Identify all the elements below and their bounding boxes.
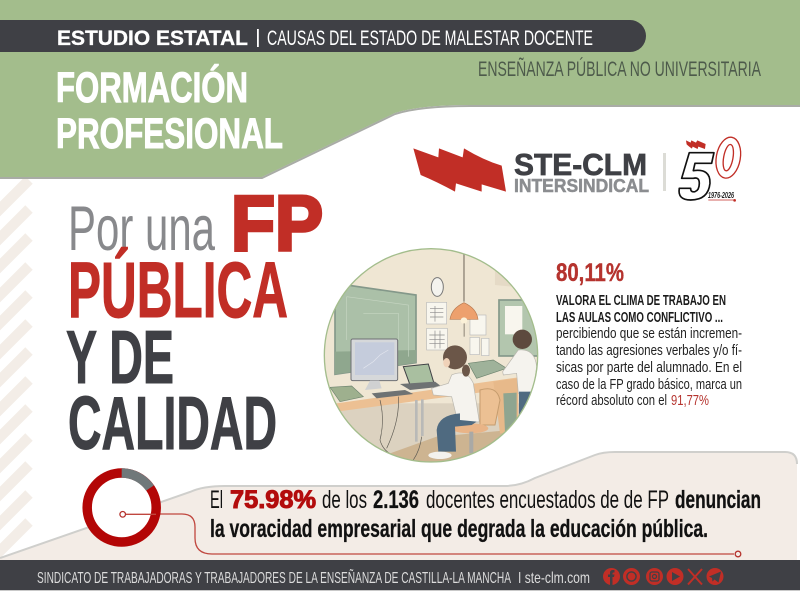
table legs and cables (415, 400, 418, 442)
main slogan: Y DE (66, 315, 174, 399)
separator (257, 29, 259, 47)
icon: red flag (413, 148, 506, 192)
anniversary dates: 1976-2026 (708, 191, 734, 200)
callout text: 2.136 (373, 486, 419, 514)
logo subtitle: INTERSINDICAL (514, 176, 649, 196)
icon: whatsapp (623, 568, 640, 585)
donut chart: 75.98% (87, 473, 156, 542)
lamp (463, 253, 465, 302)
social icons (603, 568, 724, 585)
section title: FORMACIÓN (56, 63, 248, 112)
stat body: tando las agresiones verbales y/o fí- (556, 343, 742, 359)
logo wordmark: STE-CLM (514, 147, 647, 182)
study subject: CAUSAS DEL ESTADO DE MALESTAR DOCENTE (267, 27, 593, 50)
stat body: 91,77% (671, 393, 709, 409)
icon: facebook (603, 568, 620, 585)
icon: youtube (666, 568, 684, 585)
section title: PROFESIONAL (56, 110, 283, 158)
stat body: percibiendo que se están incremen- (556, 326, 742, 342)
wall papers (427, 302, 447, 324)
stat callout: 80,11% (556, 259, 742, 409)
stat body (556, 326, 742, 409)
main slogan: CALIDAD (68, 381, 277, 465)
stat number: 80,11% (556, 259, 624, 287)
connector line (150, 514, 734, 554)
callout text: 75.98% (230, 486, 316, 514)
logo: 50 years (679, 135, 744, 202)
standing student (503, 350, 537, 393)
icon: X (688, 569, 702, 584)
illustration: students in a workshop classroom (324, 248, 538, 463)
callout text: denuncian (675, 486, 761, 514)
main slogan: Por una (68, 194, 216, 264)
desk (337, 377, 518, 412)
monitor (351, 339, 398, 381)
blackboard (335, 283, 416, 374)
callout text: El (210, 486, 223, 514)
stat heading (556, 293, 726, 326)
chair (480, 389, 500, 425)
circuit boards (330, 386, 363, 402)
stat heading: LAS AULAS COMO CONFLICTIVO ... (556, 310, 723, 326)
icon: telegram (706, 568, 724, 585)
section title (56, 63, 283, 158)
main slogan: FP (231, 179, 323, 267)
main slogan (66, 179, 323, 465)
stat body: caso de la FP grado básico, marca un (556, 377, 742, 393)
stat body: sicas por parte del alumnado. En el (556, 360, 742, 376)
bottom callout panel (0, 452, 797, 560)
stat body: récord absoluto con el (556, 393, 667, 409)
clock (431, 278, 443, 296)
study heading: ESTUDIO ESTATAL (57, 26, 248, 50)
callout text: de los (322, 486, 367, 514)
logo: STE-CLM (413, 147, 649, 196)
footer bar (0, 560, 800, 591)
green header band (0, 0, 800, 178)
footer website: I ste-clm.com (518, 570, 590, 587)
icon: instagram (646, 568, 663, 585)
callout text: docentes encuestados de de FP (426, 486, 669, 514)
seated student (432, 373, 479, 424)
footer text: SINDICATO DE TRABAJADORAS Y TRABAJADORES DE LA ENSEÑANZA DE CASTILLA-LA MANCHA (37, 567, 511, 587)
callout text (210, 486, 761, 543)
main slogan: PÚBLICA (68, 245, 288, 334)
right board (499, 300, 542, 356)
top dark title bar (0, 20, 646, 52)
laptop (403, 364, 434, 387)
